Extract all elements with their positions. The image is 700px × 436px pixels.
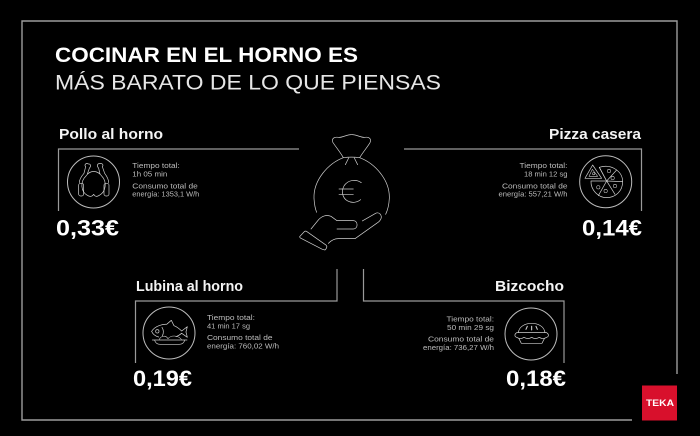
- title: COCINAR EN EL HORNO ES: [55, 43, 358, 67]
- panel: lubina al horno: [133, 269, 337, 391]
- text: lubina stats: Consumo total de: [207, 333, 272, 342]
- panel border: lubina: [136, 269, 337, 363]
- text: pollo stats: Tiempo total:: [132, 161, 180, 170]
- text: pizza stats: energía: 557,21 W/h: [498, 190, 568, 199]
- text: bizcocho stats: [423, 315, 494, 352]
- icon: money bag and hand: [300, 135, 389, 250]
- panel: bizcocho: [364, 269, 566, 391]
- title: [55, 43, 441, 94]
- text: pizza stats: Consumo total de: [502, 181, 568, 190]
- icon: pizza: [580, 156, 632, 208]
- logo: Teka: [642, 386, 677, 420]
- text: pizza stats: Tiempo total:: [520, 161, 568, 170]
- price: bizcocho: 0,18€: [506, 366, 566, 391]
- text: lubina stats: 41 min 17 sg: [207, 321, 250, 330]
- text: bizcocho stats: Consumo total de: [428, 335, 494, 344]
- panel border: pizza: [404, 149, 642, 211]
- icon: chicken: [68, 156, 120, 208]
- title: MÁS BARATO DE LO QUE PIENSAS: [55, 70, 441, 94]
- logo: Teka: TEKA: [646, 398, 675, 408]
- heading: pollo: Pollo al horno: [59, 126, 163, 143]
- text: bizcocho stats: energía: 736,27 W/h: [423, 343, 494, 352]
- text: pollo stats: 1h 05 min: [132, 170, 167, 179]
- price: pollo: 0,33€: [56, 216, 119, 241]
- price: pizza: 0,14€: [582, 216, 642, 241]
- text: pollo stats: Consumo total de: [132, 181, 198, 190]
- text: pollo stats: [132, 161, 199, 199]
- panel border: bizcocho: [364, 269, 564, 363]
- text: pollo stats: energía: 1353,1 W/h: [132, 190, 199, 199]
- icon: pie: [505, 308, 557, 360]
- text: lubina stats: [207, 313, 279, 350]
- heading: lubina: Lubina al horno: [136, 278, 243, 295]
- panel: pollo al horno: [56, 126, 299, 241]
- icon: fish on plate: [143, 307, 195, 359]
- price: lubina: 0,19€: [133, 366, 192, 391]
- text: lubina stats: Tiempo total:: [207, 313, 255, 322]
- heading: pizza: Pizza casera: [549, 126, 642, 143]
- text: lubina stats: energía: 760,02 W/h: [207, 341, 279, 350]
- panel: pizza casera: [404, 126, 642, 241]
- heading: bizcocho: Bizcocho: [495, 278, 564, 295]
- text: bizcocho stats: 50 min 29 sg: [447, 323, 494, 332]
- text: pizza stats: [498, 161, 568, 199]
- text: bizcocho stats: Tiempo total:: [446, 315, 494, 324]
- text: pizza stats: 18 min 12 sg: [524, 170, 568, 179]
- panel border: pollo: [58, 149, 299, 211]
